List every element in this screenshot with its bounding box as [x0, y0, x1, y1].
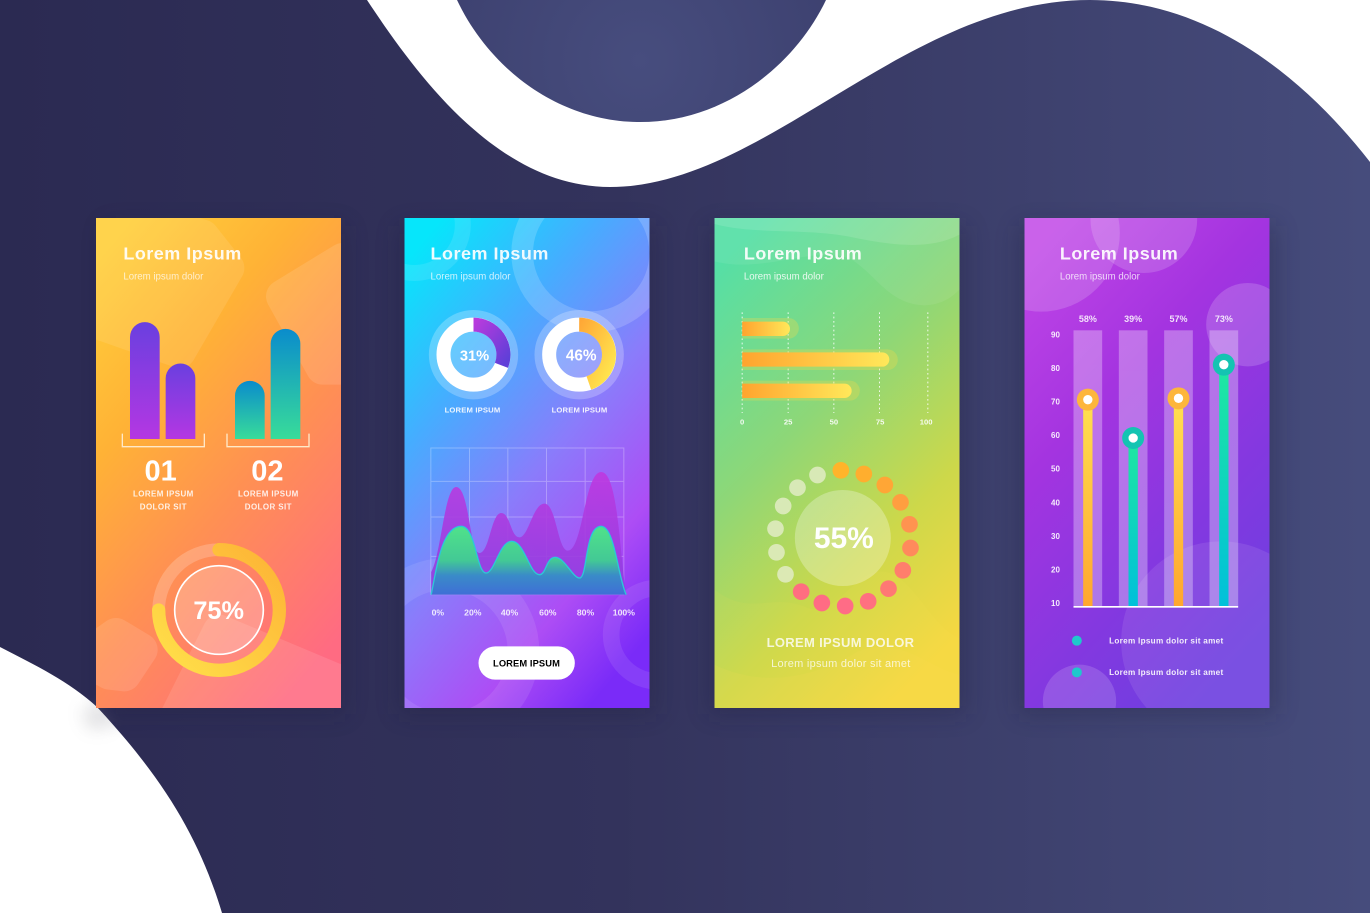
x-axis labels: 100%: [613, 607, 635, 617]
donut 31%: [429, 310, 518, 415]
column chart: 30: [1051, 532, 1060, 541]
dot ring gauge 55%: 55%: [814, 522, 874, 555]
label 02: [238, 455, 299, 512]
column chart: 60: [1051, 431, 1060, 440]
column chart: 50: [1051, 465, 1060, 474]
horizontal bar chart: 100: [920, 417, 933, 426]
horizontal bar chart: 75: [876, 417, 885, 426]
title: Lorem Ipsum: [430, 244, 549, 264]
column chart: 39%: [1124, 314, 1142, 324]
area chart: [431, 448, 626, 595]
horizontal bar chart: [740, 312, 933, 426]
column chart: 90: [1051, 330, 1060, 339]
card shadows: [105, 226, 1276, 714]
label 01: DOLOR SIT: [140, 503, 187, 512]
column chart: [1051, 314, 1238, 608]
legend: Lorem Ipsum dolor sit amet: [1109, 668, 1223, 677]
donut 31%: 31%: [460, 348, 489, 364]
label 02: DOLOR SIT: [245, 503, 292, 512]
column chart: 58%: [1079, 314, 1097, 324]
column chart: 70: [1051, 398, 1060, 407]
bar chart 02: [227, 329, 309, 447]
label 02: 02: [251, 455, 283, 487]
donut 31%: LOREM IPSUM: [445, 406, 500, 415]
dot ring gauge 55%: [767, 462, 919, 614]
donut 46%: LOREM IPSUM: [552, 406, 607, 415]
background: top semicircle: [457, 0, 826, 122]
title: Lorem Ipsum: [744, 244, 862, 264]
title: Lorem Ipsum: [1060, 244, 1178, 264]
column chart: 40: [1051, 498, 1060, 507]
column chart: 80: [1051, 364, 1060, 373]
column chart: 57%: [1170, 314, 1187, 324]
label 01: [133, 455, 194, 512]
label 01: LOREM IPSUM: [133, 490, 194, 499]
title: Lorem ipsum dolor: [430, 272, 511, 283]
column chart: 10: [1051, 599, 1060, 608]
x-axis labels: 60%: [539, 607, 557, 617]
panel: green progress card: [714, 218, 959, 708]
bar chart 01: [122, 322, 204, 447]
title: [744, 244, 862, 283]
label 02: LOREM IPSUM: [238, 490, 299, 499]
title: Lorem ipsum dolor: [1060, 272, 1141, 283]
column chart: 73%: [1215, 314, 1233, 324]
title: Lorem ipsum dolor: [744, 272, 825, 283]
label 01: 01: [145, 455, 177, 487]
donut gauge 75%: [159, 550, 279, 670]
x-axis labels: 80%: [577, 607, 594, 617]
panel: blue donut and area card: [404, 218, 650, 708]
horizontal bar chart: 25: [784, 417, 793, 426]
title: [1060, 244, 1178, 283]
column chart: 20: [1051, 565, 1060, 574]
horizontal bar chart: 50: [830, 417, 838, 426]
horizontal bar chart: 0: [740, 417, 744, 426]
donut gauge 75%: 75%: [193, 597, 244, 625]
donut 46%: [534, 310, 624, 415]
legend: Lorem Ipsum dolor sit amet: [1109, 636, 1223, 645]
caption: Lorem ipsum dolor sit amet: [771, 658, 911, 670]
panel: orange bar card: [96, 218, 341, 708]
title: [430, 244, 549, 283]
panel: purple column card: [1024, 218, 1270, 708]
caption: [767, 635, 915, 670]
x-axis labels: [432, 607, 635, 617]
title: [123, 244, 242, 283]
title: Lorem ipsum dolor: [123, 272, 204, 283]
caption: LOREM IPSUM DOLOR: [767, 635, 915, 650]
donut 46%: 46%: [566, 348, 597, 365]
title: Lorem Ipsum: [123, 244, 242, 264]
x-axis labels: 40%: [501, 607, 518, 617]
x-axis labels: 0%: [432, 607, 444, 617]
shadow on white bottom-left blob: [80, 708, 113, 730]
button: [478, 646, 575, 680]
legend: [1072, 636, 1223, 677]
x-axis labels: 20%: [464, 607, 482, 617]
button: LOREM IPSUM: [493, 658, 560, 668]
